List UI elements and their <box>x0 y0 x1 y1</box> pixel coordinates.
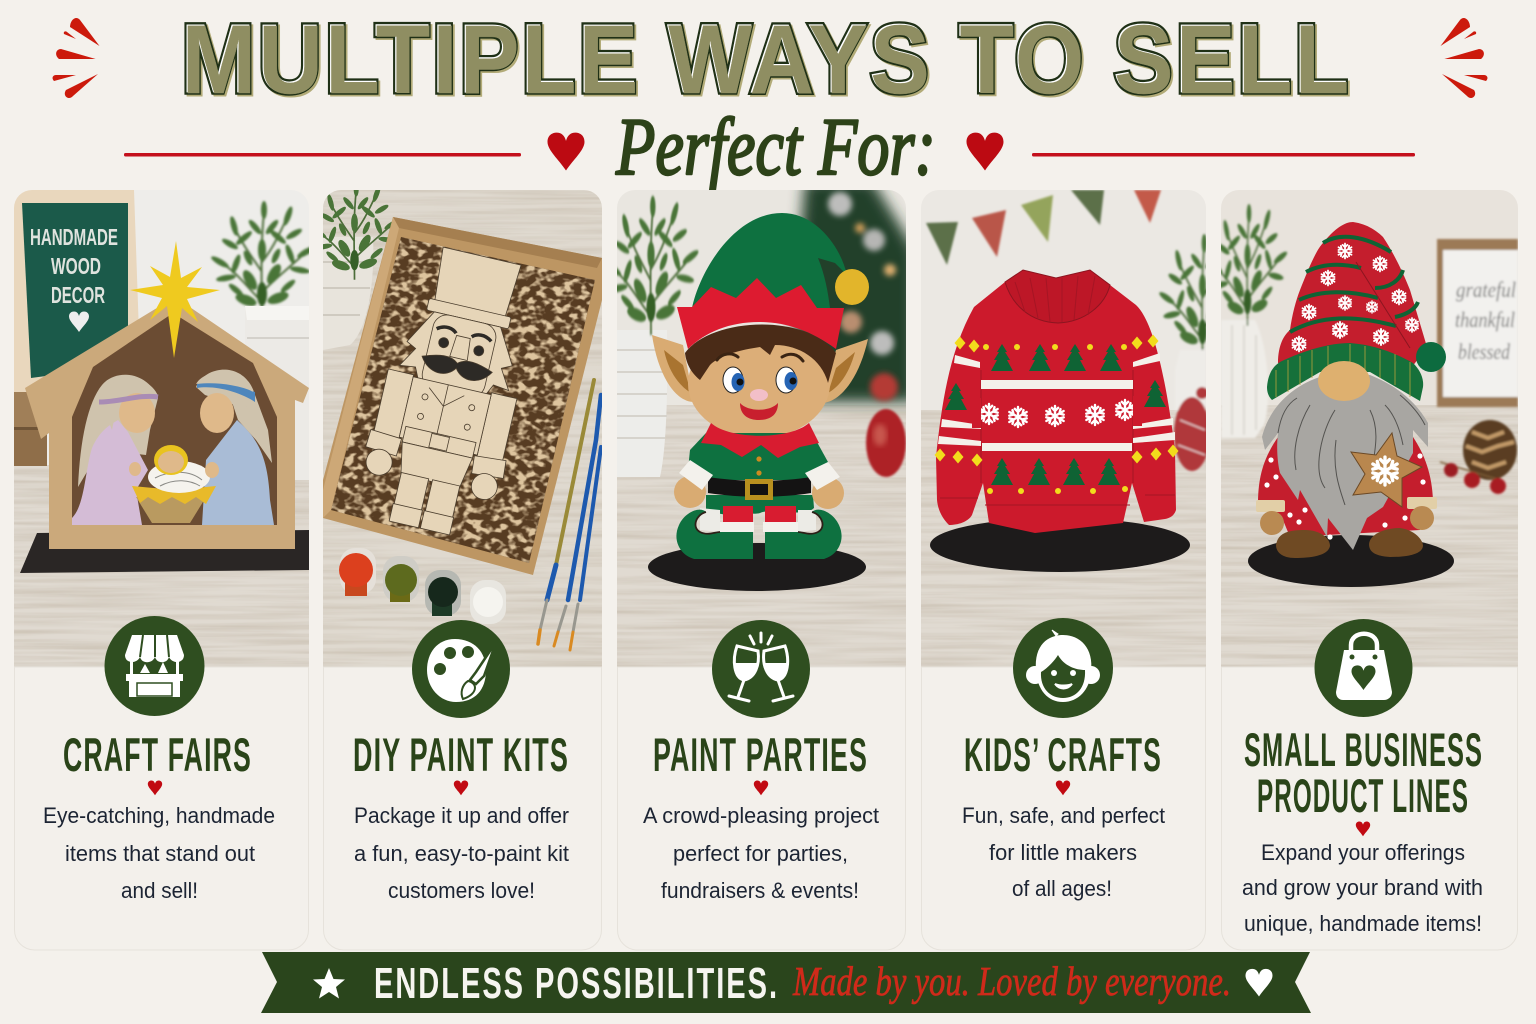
decorative burst: right <box>1440 18 1487 98</box>
decorative burst: left <box>53 18 100 98</box>
paint brushes <box>538 380 601 650</box>
icon: wine glasses <box>712 620 810 718</box>
photo: nutcracker kit <box>310 181 602 670</box>
photo: nativity wood decor <box>14 190 316 670</box>
gnome base <box>1248 535 1454 587</box>
description <box>43 803 275 903</box>
text panel <box>618 667 906 950</box>
icon: market stall <box>104 616 204 716</box>
paint pots <box>339 548 506 624</box>
description: and grow your brand with <box>1242 875 1483 900</box>
title: MULTIPLE WAYS TO SELL <box>181 4 1351 113</box>
nutcracker <box>366 246 522 536</box>
small heart <box>754 780 768 795</box>
panel: DIY paint kits <box>310 181 602 950</box>
icon: heart <box>1246 969 1272 996</box>
banner text: ENDLESS POSSIBILITIES. <box>374 959 779 1008</box>
photo: gnome: grateful <box>1456 277 1516 302</box>
description: A crowd-pleasing project <box>643 803 879 828</box>
description <box>1242 840 1483 936</box>
photo: ugly sweater <box>921 190 1206 666</box>
icon: shopping bag <box>1314 619 1412 717</box>
photo: nativity wood decor: HANDMADE <box>30 224 118 250</box>
banner script: Made by you. Loved by everyone. <box>792 958 1231 1004</box>
gnome <box>1258 437 1433 537</box>
description: Expand your offerings <box>1261 840 1465 865</box>
sweater base <box>930 518 1190 572</box>
description: of all ages! <box>1012 876 1112 901</box>
sweater <box>936 270 1176 533</box>
description: unique, handmade items! <box>1244 911 1482 936</box>
description: for little makers <box>989 840 1137 865</box>
description: items that stand out <box>65 841 255 866</box>
panel: kids crafts <box>921 190 1206 950</box>
small heart <box>1056 780 1070 795</box>
subtitle row: Perfect For: Perfect For: <box>615 101 936 192</box>
photo: gnome: thankful <box>1455 307 1515 332</box>
title: MULTIPLE WAYS TO SELL <box>182 5 1352 114</box>
description <box>354 803 569 903</box>
subtitle row: Perfect For <box>124 101 1415 192</box>
elf base <box>648 543 866 591</box>
photo: gnome <box>1208 190 1518 670</box>
small heart <box>148 780 162 795</box>
photo: elf <box>604 180 915 670</box>
panel: craft fairs <box>14 190 316 950</box>
elf figure <box>692 213 847 308</box>
heading: DIY PAINT KITS <box>353 728 569 781</box>
description: Fun, safe, and perfect <box>962 803 1165 828</box>
photo: gnome: blessed <box>1458 339 1511 364</box>
icon: palette <box>412 620 510 718</box>
photo: nativity wood decor: DECOR <box>51 282 105 308</box>
panel: small business product lines <box>1208 190 1518 950</box>
description: a fun, easy-to-paint kit <box>354 841 569 866</box>
small heart <box>1356 821 1370 836</box>
text panel <box>324 667 602 950</box>
description <box>962 803 1165 901</box>
text panel <box>922 667 1206 950</box>
bottom ribbon banner <box>261 952 1311 1013</box>
icon: star <box>313 968 345 998</box>
description: Package it up and offer <box>354 803 569 828</box>
title: MULTIPLE WAYS TO SELL <box>183 6 1353 115</box>
heading: KIDS’ CRAFTS <box>964 728 1162 781</box>
description: and sell! <box>121 878 198 903</box>
heading: CRAFT FAIRS <box>63 728 252 781</box>
description: Eye-catching, handmade <box>43 803 275 828</box>
description <box>643 803 879 903</box>
description: fundraisers & events! <box>661 878 859 903</box>
title: MULTIPLE WAYS TO SELL <box>181 4 1351 113</box>
text panel <box>1222 667 1518 950</box>
description: perfect for parties, <box>673 841 848 866</box>
heading: PAINT PARTIES <box>653 728 868 781</box>
photo: nativity wood decor: WOOD <box>51 253 101 279</box>
small heart <box>454 780 468 795</box>
icon: child face <box>1013 618 1113 718</box>
panel: paint parties <box>604 180 915 950</box>
heading <box>1244 723 1483 822</box>
description: customers love! <box>388 878 535 903</box>
text panel <box>14 667 308 950</box>
